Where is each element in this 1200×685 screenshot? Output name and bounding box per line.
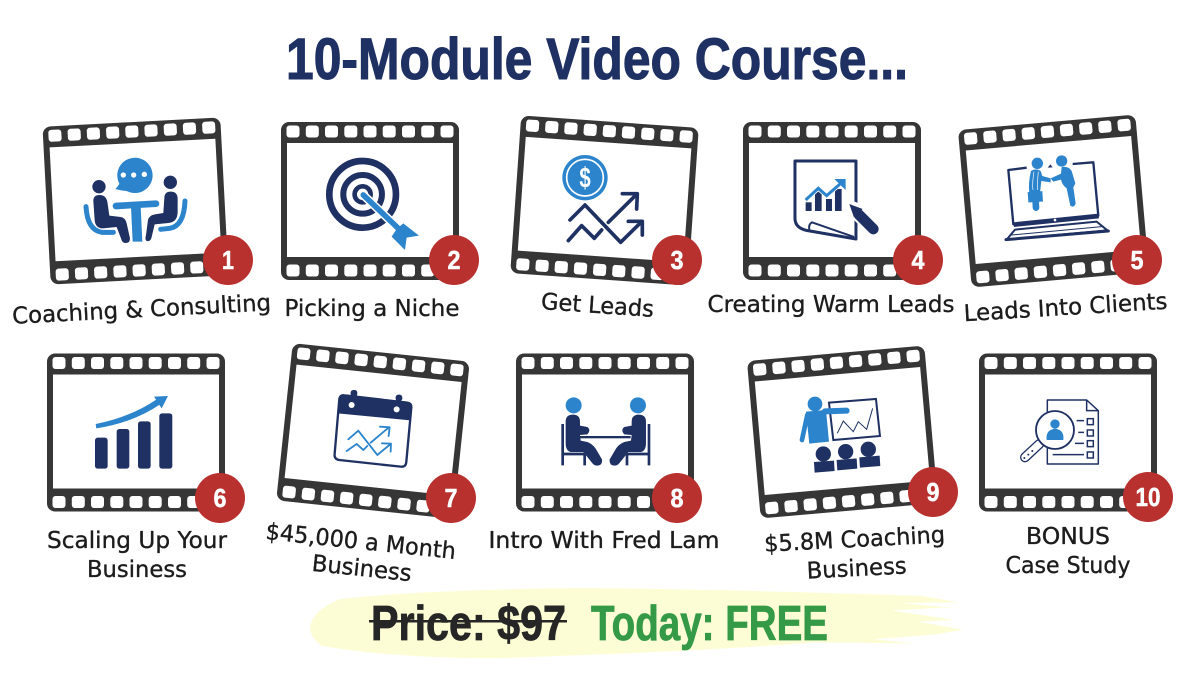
label 7 — [264, 519, 457, 587]
label 5: Leads Into Clients — [963, 289, 1168, 327]
badge 1 — [203, 235, 253, 285]
badge 10: 10 — [1136, 482, 1160, 512]
film frame 5 — [958, 115, 1149, 287]
icon: target with dart — [329, 161, 419, 250]
label 10: BONUS — [1026, 524, 1110, 550]
panel: module 4 — [708, 122, 954, 318]
label 9: $5.8M Coaching — [764, 522, 946, 558]
badge 4: 4 — [912, 245, 925, 275]
icon: report with chart and magnifier — [795, 161, 873, 239]
film frame 7 — [276, 343, 470, 519]
panel: module 7 — [264, 343, 476, 587]
label 9: Business — [806, 553, 907, 585]
badge 3 — [652, 235, 702, 285]
panel: module 9 — [747, 346, 958, 585]
label 3: Get Leads — [540, 289, 655, 323]
panel: module 10 — [979, 354, 1173, 579]
badge 2 — [429, 235, 479, 285]
badge 3: 3 — [670, 245, 684, 275]
icon: laptop with handshake — [1006, 155, 1108, 240]
badge 9 — [908, 467, 958, 517]
badge 5: 5 — [1130, 245, 1144, 275]
label 1: Coaching & Consulting — [12, 290, 272, 330]
panel: module 1 — [12, 117, 272, 330]
badge 7 — [426, 473, 476, 523]
film frame 3 — [510, 115, 699, 286]
title: 10-Module Video Course... — [286, 27, 908, 92]
badge 7: 7 — [444, 483, 458, 513]
badge 5 — [1112, 235, 1162, 285]
panel: module 8 — [488, 354, 720, 554]
film frame 2 — [281, 122, 459, 280]
label 6: Business — [87, 557, 187, 583]
icon: dollar coin with rising arrows — [562, 155, 642, 242]
panel: module 6 — [47, 354, 245, 583]
film frame 9 — [747, 346, 938, 518]
icon: presenter with audience — [802, 397, 880, 473]
badge 1: 1 — [222, 245, 234, 275]
label 4: Creating Warm Leads — [708, 292, 954, 318]
label 8: Intro With Fred Lam — [488, 528, 720, 554]
icon: people at table with speech bubble — [86, 158, 185, 243]
badge 10 — [1123, 472, 1173, 522]
icon: calendar with arrows — [335, 390, 412, 467]
icon: two people seated at table — [563, 397, 649, 466]
badge 9: 9 — [926, 477, 940, 507]
film frame 10 — [979, 354, 1157, 512]
badge 8: 8 — [670, 483, 684, 513]
label 6: Scaling Up Your — [47, 528, 228, 554]
panel: module 5 — [958, 115, 1168, 327]
panel: module 3 — [510, 115, 702, 323]
icon: case study document with magnifier — [1023, 400, 1098, 464]
today free price: Today: FREE — [591, 597, 828, 651]
label 9 — [764, 522, 946, 585]
film frame 6 — [47, 354, 225, 512]
icon: rising bar chart — [95, 396, 172, 469]
icon: dollar coin with rising arrows: $ — [579, 163, 591, 195]
old price struck through: Price: $97 — [371, 597, 566, 651]
label 7: Business — [311, 551, 413, 587]
film frame 8 — [516, 354, 694, 512]
label 2: Picking a Niche — [284, 296, 460, 322]
badge 6: 6 — [214, 483, 226, 513]
panel: price banner — [310, 588, 963, 658]
badge 8 — [652, 473, 702, 523]
panel: module 2 — [281, 122, 479, 322]
film frame 4 — [743, 122, 921, 280]
film frame 1 — [42, 117, 229, 285]
label 7: $45,000 a Month — [264, 519, 457, 565]
badge 6 — [195, 473, 245, 523]
label 10: Case Study — [1006, 553, 1130, 579]
badge 4 — [893, 235, 943, 285]
brush stroke highlight — [310, 588, 963, 658]
badge 2: 2 — [448, 245, 460, 275]
